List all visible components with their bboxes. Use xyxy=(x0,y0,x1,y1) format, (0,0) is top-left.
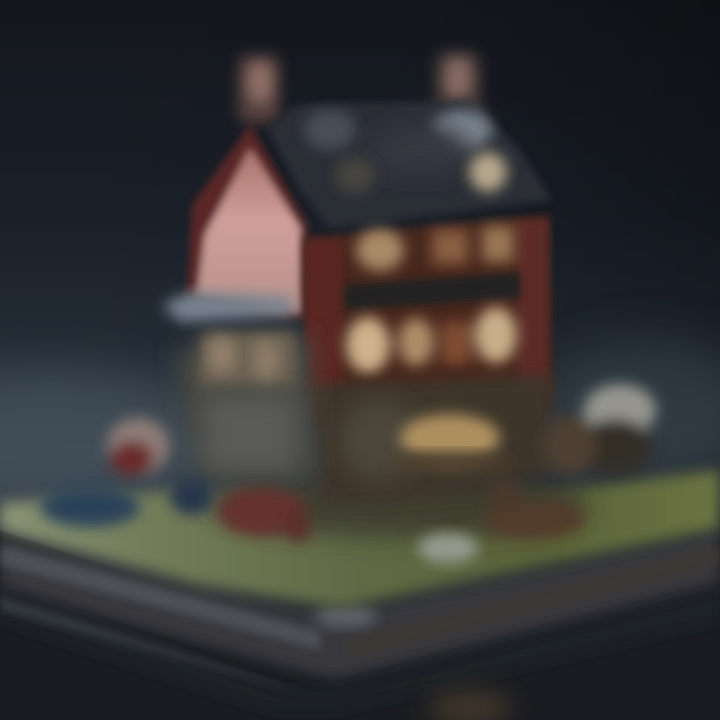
brick facade xyxy=(305,215,552,420)
side annex xyxy=(162,292,315,480)
platform base xyxy=(0,530,720,720)
blue bush left xyxy=(40,487,140,527)
red car or bush xyxy=(218,488,310,543)
grass lawn xyxy=(0,470,720,608)
roof dormer light xyxy=(469,152,507,192)
pink gable wall xyxy=(187,125,308,320)
red tree xyxy=(107,418,169,475)
stone ground floor xyxy=(310,375,555,505)
chimney: left xyxy=(238,55,280,123)
chimney: right xyxy=(436,52,480,120)
slate roof xyxy=(268,100,552,228)
blue bush small xyxy=(170,479,214,515)
right tree cluster xyxy=(544,384,656,475)
white shrub foreground xyxy=(418,533,478,563)
upper windows xyxy=(356,226,514,271)
dark band between floors xyxy=(345,272,520,310)
arched entrance xyxy=(400,414,500,462)
lower windows xyxy=(346,307,517,373)
annex roof xyxy=(162,292,295,322)
brown shrubs foreground xyxy=(485,480,585,538)
